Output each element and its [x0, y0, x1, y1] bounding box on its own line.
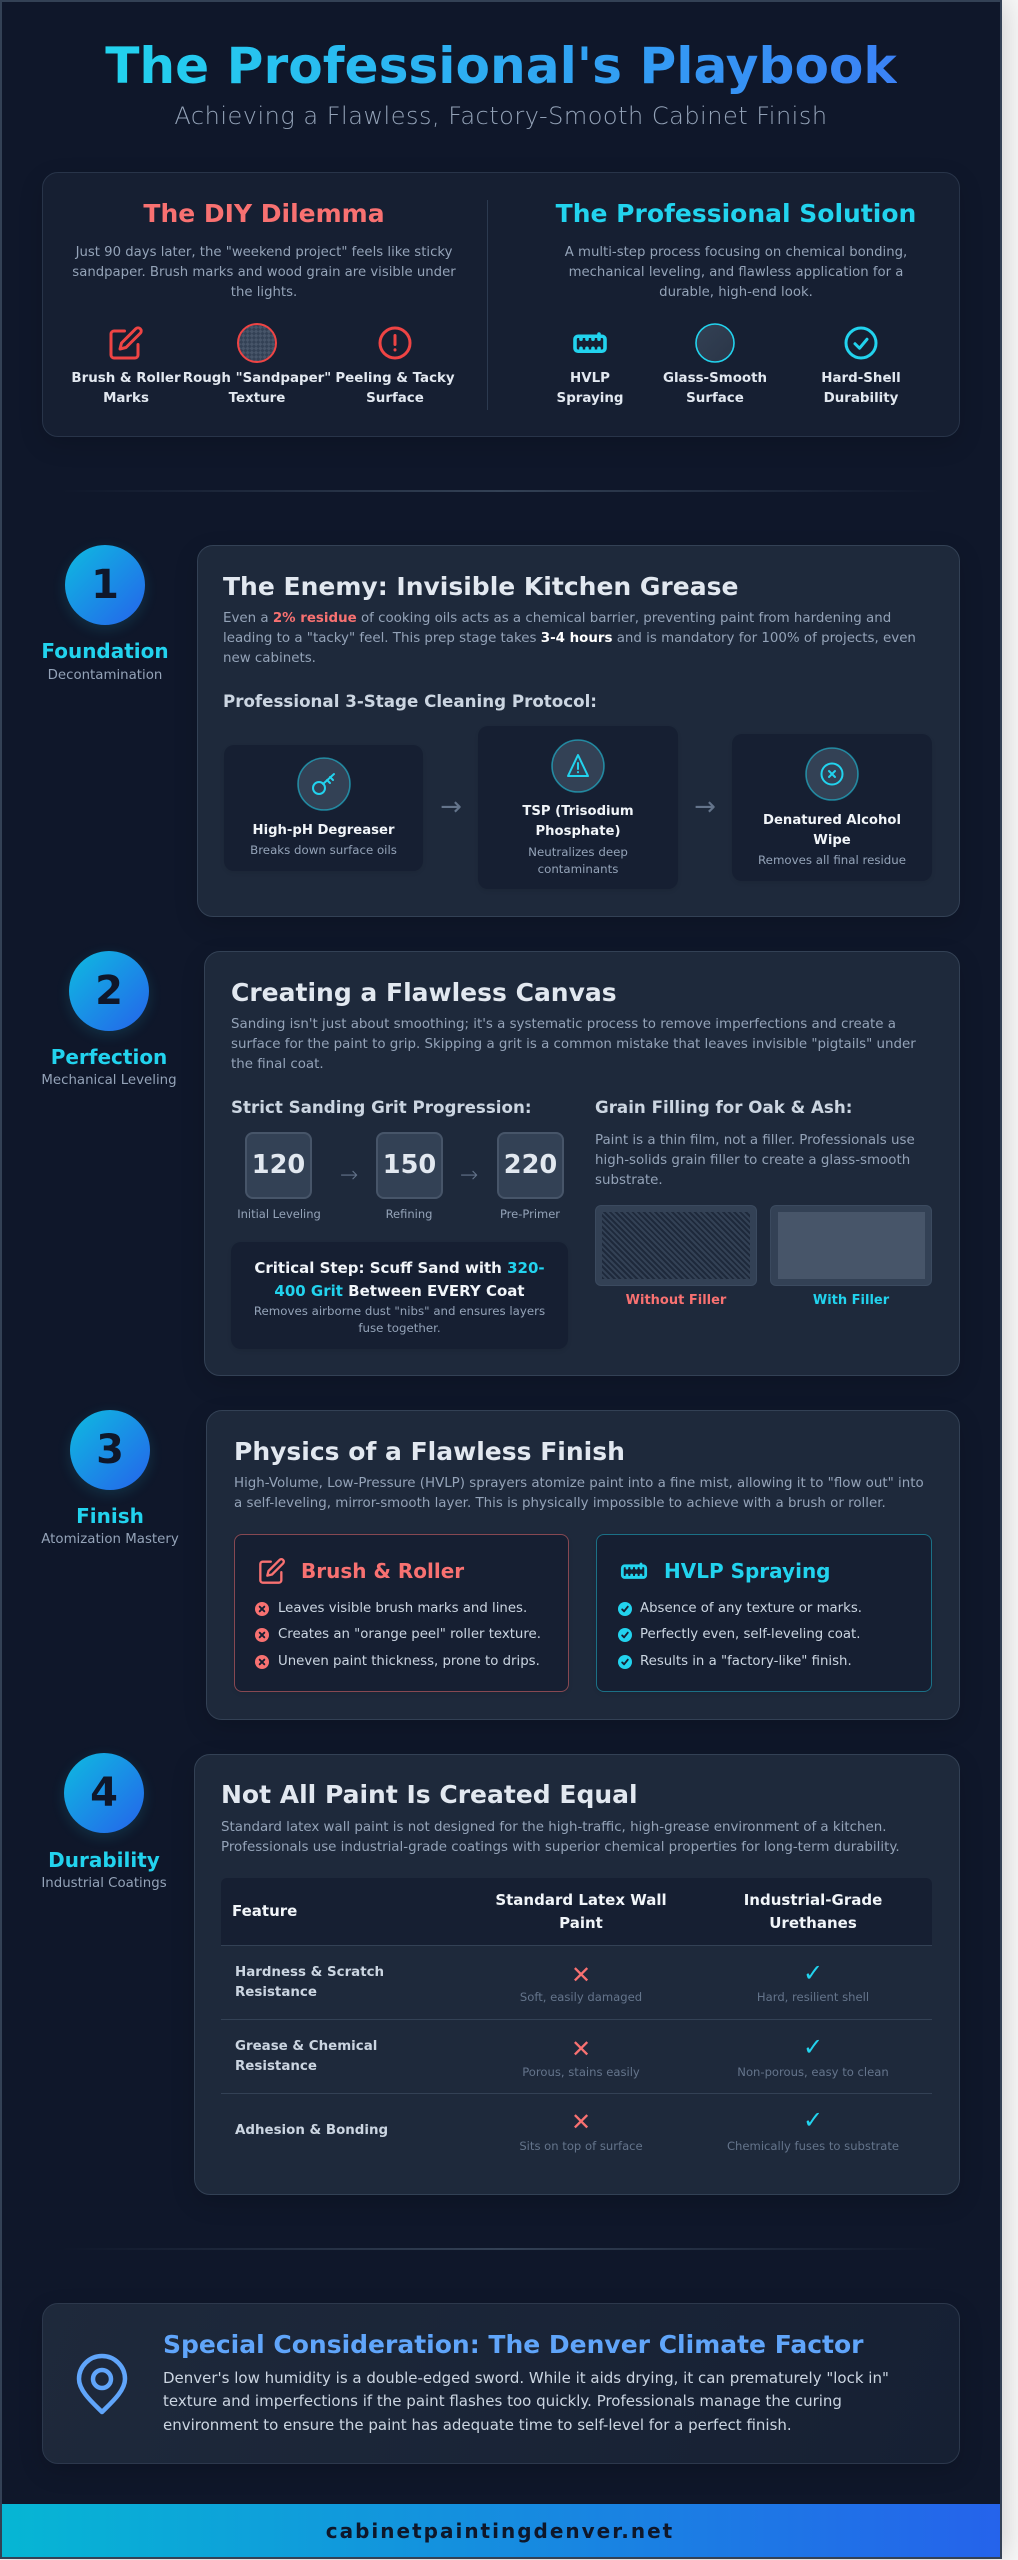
row: grease — [235, 2033, 889, 2079]
bullet list — [618, 1601, 862, 1669]
row: adhesion: Chemically fuses to substrate — [727, 2139, 899, 2153]
text: grain filling — [595, 1133, 915, 1188]
bullet list: Uneven paint thickness, prone to drips. — [278, 1654, 540, 1669]
text: professional solution description: durable, high-end look. — [659, 285, 813, 300]
icon: spray — [620, 1562, 648, 1579]
panel: step 2 sanding — [204, 951, 960, 1376]
label: peeling and tacky surface — [335, 371, 455, 406]
callout heading: 400 Grit Between EVERY Coat — [274, 1282, 525, 1300]
icon: peeling alert — [378, 326, 412, 360]
heading: professional solution: The Professional Solution — [556, 199, 916, 228]
label: hard-shell durability — [821, 371, 901, 406]
row: grease: Non-porous, easy to clean — [737, 2065, 889, 2079]
badge: step 1: 1 — [91, 562, 119, 608]
badge: step 4: 4 — [90, 1770, 118, 1816]
text block: surface for the paint to grip. Skipping a grit is a common mistake that leaves invisible "pigtails" under — [231, 1037, 916, 1052]
text: grain filling: high-solids grain filler to create a glass-smooth — [595, 1153, 910, 1168]
card heading: HVLP Spraying — [664, 1559, 830, 1583]
text: TSP — [522, 804, 634, 839]
bullet list: Results in a "factory-like" finish. — [640, 1654, 852, 1669]
grit label: 220: Pre-Primer — [500, 1207, 560, 1221]
row: grease: Resistance — [235, 2059, 317, 2074]
text block — [234, 1476, 924, 1511]
label: rough sandpaper texture: Texture — [229, 391, 285, 406]
icon: map pin — [76, 2354, 128, 2414]
card: brush and roller — [234, 1534, 569, 1692]
footer band — [2, 2504, 1000, 2557]
badge: step 4 — [64, 1753, 144, 1833]
label: glass-smooth surface: Surface — [686, 391, 744, 406]
row: hardness: ✕ — [571, 1961, 591, 1989]
row: hardness: Soft, easily damaged — [520, 1990, 642, 2004]
label: brush and roller marks — [71, 371, 181, 406]
label: HVLP spraying — [557, 371, 623, 406]
text: alcohol wipe: Wipe — [813, 833, 851, 848]
callout note: Removes airborne dust "nibs" and ensures layers — [254, 1304, 545, 1318]
label: hard-shell durability: Durability — [824, 391, 898, 406]
row: grease: Porous, stains easily — [522, 2065, 640, 2079]
label: brush and roller marks: Marks — [103, 391, 149, 406]
row: hardness — [235, 1959, 869, 2004]
label: without filler: Without Filler — [626, 1293, 726, 1308]
arrow: → — [340, 1163, 358, 1188]
label: foundation: Foundation — [41, 639, 169, 663]
panel: step 4 paint comparison — [194, 1754, 960, 2195]
label: mechanical leveling: Mechanical Leveling — [41, 1073, 177, 1088]
text: TSP note: Neutralizes deep — [528, 845, 628, 859]
subheading: Professional 3-Stage Cleaning Protocol: — [223, 691, 597, 711]
text: DIY dilemma description — [72, 245, 456, 300]
row: grease: ✓ — [803, 2033, 823, 2061]
heading: DIY dilemma: The DIY Dilemma — [143, 199, 385, 228]
row: grease: Grease & Chemical — [235, 2039, 377, 2054]
label: rough sandpaper texture: Rough "Sandpaper" — [183, 371, 331, 386]
bullet list — [255, 1601, 541, 1669]
bullet list: Absence of any texture or marks. — [640, 1601, 862, 1616]
heading: Physics of a Flawless Finish — [234, 1437, 625, 1466]
comparison table — [221, 1878, 932, 2153]
text: professional solution description — [564, 245, 907, 300]
text: TSP note: contaminants — [538, 862, 618, 876]
label: glass-smooth surface — [663, 371, 767, 406]
text block: Even a 2% residue of cooking oils acts as a chemical barrier, preventing paint from hardening and — [223, 611, 891, 626]
badge: step 2 — [69, 951, 149, 1031]
text: DIY dilemma description: Just 90 days later, the "weekend project" feels like sticky — [76, 245, 452, 260]
arrow: → — [440, 792, 462, 822]
icon: sandpaper texture — [237, 323, 277, 363]
label: hard-shell durability: Hard-Shell — [821, 371, 901, 386]
callout heading — [254, 1259, 545, 1300]
callout note — [254, 1304, 545, 1334]
label: perfection: Perfection — [51, 1045, 167, 1069]
text: alcohol wipe note: Removes all final residue — [758, 853, 906, 867]
badge: step 2: 2 — [95, 968, 123, 1014]
label: peeling and tacky surface: Peeling & Tacky — [335, 371, 455, 386]
subheading: grit progression: Strict Sanding Grit Progression: — [231, 1097, 532, 1117]
text: alcohol wipe — [763, 813, 901, 848]
panel: step 1 grease — [197, 545, 960, 917]
card: degreaser — [224, 745, 423, 871]
grit chip: 220 — [497, 1132, 564, 1199]
title: The Professional's Playbook — [105, 36, 897, 95]
label: atomization mastery: Atomization Mastery — [41, 1532, 179, 1547]
text block: the final coat. — [231, 1057, 324, 1072]
row: hardness: ✓ — [803, 1959, 823, 1987]
row: adhesion: ✓ — [803, 2106, 823, 2134]
label: brush and roller marks: Brush & Roller — [71, 371, 181, 386]
grit chip: 120 — [245, 1132, 312, 1199]
table header: Industrial-Grade — [744, 1890, 882, 1908]
text block: Sanding isn't just about smoothing; it's a systematic process to remove imperfections and create a — [231, 1017, 896, 1032]
callout heading: Critical Step: Scuff Sand with 320- — [254, 1259, 545, 1277]
text block: a self-leveling, mirror-smooth layer. This is physically impossible to achieve with a brush or roller. — [234, 1496, 886, 1511]
row: adhesion: ✕ — [571, 2108, 591, 2136]
card heading: Brush & Roller — [301, 1559, 464, 1583]
bullet list: Leaves visible brush marks and lines. — [278, 1601, 527, 1616]
text block: leading to a "tacky" feel. This prep stage takes 3-4 hours and is mandatory for 100% of projects, even — [223, 631, 916, 646]
grit chip: 220: 220 — [504, 1150, 557, 1180]
text block: new cabinets. — [223, 651, 316, 666]
text block: Professionals use industrial-grade coatings with superior chemical properties for long-term durability. — [221, 1840, 900, 1855]
card: HVLP spraying — [596, 1534, 932, 1692]
swatch: without filler — [595, 1205, 757, 1286]
text: grain filling: substrate. — [595, 1173, 663, 1188]
badge: step 3: 3 — [96, 1427, 124, 1473]
grit chip: 120: 120 — [252, 1150, 305, 1180]
heading: Not All Paint Is Created Equal — [221, 1780, 638, 1809]
text: professional solution description: mechanical leveling, and flawless application for a — [569, 265, 903, 280]
text: TSP note — [528, 845, 628, 876]
bullet list: Creates an "orange peel" roller texture. — [278, 1627, 541, 1642]
table header — [221, 1878, 932, 1945]
icon: HVLP spray — [573, 332, 607, 353]
row: adhesion — [235, 2106, 899, 2153]
callout note: fuse together. — [358, 1320, 441, 1334]
card: TSP — [478, 726, 678, 889]
arrow: → — [694, 792, 716, 822]
text: degreaser: High-pH Degreaser — [253, 823, 394, 838]
icon: glass-smooth surface — [695, 323, 735, 363]
badge: step 1 — [65, 545, 145, 625]
label: industrial coatings: Industrial Coatings — [41, 1876, 167, 1891]
text: degreaser note: Breaks down surface oils — [250, 843, 397, 857]
card: alcohol wipe — [732, 734, 932, 881]
badge: step 3 — [70, 1410, 150, 1490]
icon: brush marks — [110, 326, 143, 360]
icon: hard-shell check — [844, 326, 878, 360]
text: TSP: Phosphate) — [536, 824, 620, 839]
text block: High-Volume, Low-Pressure (HVLP) sprayers atomize paint into a fine mist, allowing it to "flow out" into — [234, 1476, 924, 1491]
callout: critical step — [231, 1242, 568, 1349]
label: glass-smooth surface: Glass-Smooth — [663, 371, 767, 386]
text block — [163, 2369, 889, 2434]
row: adhesion: Adhesion & Bonding — [235, 2123, 388, 2138]
text block — [223, 611, 916, 666]
icon: warning — [551, 739, 605, 793]
table header: Feature — [232, 1902, 297, 1920]
subheading: grain filling: Grain Filling for Oak & Ash: — [595, 1097, 852, 1117]
text block: environment to ensure the paint has adequate time to self-level for a perfect finish. — [163, 2416, 792, 2434]
panel: DIY dilemma vs professional solution — [42, 172, 960, 437]
footer URL: cabinetpaintingdenver.net — [326, 2519, 674, 2543]
table header: Standard Latex Wall — [495, 1890, 667, 1908]
bullet list: Perfectly even, self-leveling coat. — [640, 1627, 860, 1642]
text: professional solution description: A multi-step process focusing on chemical bonding, — [565, 245, 907, 260]
row: hardness: Resistance — [235, 1985, 317, 2000]
grit chip: 150 — [376, 1132, 443, 1199]
panel: step 3 physics — [206, 1410, 960, 1720]
text: grain filling: Paint is a thin film, not a filler. Professionals use — [595, 1133, 915, 1148]
table header: Paint — [559, 1914, 603, 1932]
label: peeling and tacky surface: Surface — [366, 391, 424, 406]
label: HVLP spraying: HVLP — [570, 371, 610, 386]
swatch: with filler — [770, 1205, 932, 1286]
text block — [221, 1820, 900, 1855]
grit chip: 150: 150 — [383, 1150, 436, 1180]
text block: texture and imperfections if the paint flashes too quickly. Professionals manage the curing — [163, 2392, 842, 2410]
row: adhesion: Sits on top of surface — [519, 2139, 643, 2153]
text: TSP: TSP (Trisodium — [522, 804, 634, 819]
text: alcohol wipe: Denatured Alcohol — [763, 813, 901, 828]
row: hardness: Hardness & Scratch — [235, 1965, 384, 1980]
label: finish: Finish — [76, 1504, 144, 1528]
icon: key — [297, 757, 351, 811]
grit label: 120: Initial Leveling — [237, 1207, 321, 1221]
subtitle: Achieving a Flawless, Factory-Smooth Cabinet Finish — [174, 102, 828, 130]
text block: Denver's low humidity is a double-edged sword. While it aids drying, it can prematurely "lock in" — [163, 2369, 889, 2387]
arrow: → — [460, 1163, 478, 1188]
text: DIY dilemma description: sandpaper. Brush marks and wood grain are visible under — [72, 265, 456, 280]
label: HVLP spraying: Spraying — [557, 391, 623, 406]
label: durability: Durability — [48, 1848, 160, 1872]
label: with filler: With Filler — [813, 1293, 889, 1308]
text block: Standard latex wall paint is not designed for the high-traffic, high-grease environment of a kitchen. — [221, 1820, 886, 1835]
divider — [487, 200, 488, 410]
row: grease: ✕ — [571, 2035, 591, 2063]
heading: The Enemy: Invisible Kitchen Grease — [223, 572, 738, 601]
panel: Denver climate — [42, 2303, 960, 2464]
grit label: 150: Refining — [386, 1207, 432, 1221]
heading: Creating a Flawless Canvas — [231, 978, 617, 1007]
icon: brush — [259, 1558, 285, 1584]
text: DIY dilemma description: the lights. — [231, 285, 297, 300]
text block — [231, 1017, 916, 1072]
icon: x circle — [805, 747, 859, 801]
label: rough sandpaper texture — [183, 371, 331, 406]
label: decontamination: Decontamination — [48, 668, 162, 683]
heading: Special Consideration: The Denver Climate Factor — [163, 2330, 863, 2359]
table header: Urethanes — [769, 1914, 857, 1932]
row: hardness: Hard, resilient shell — [757, 1990, 869, 2004]
